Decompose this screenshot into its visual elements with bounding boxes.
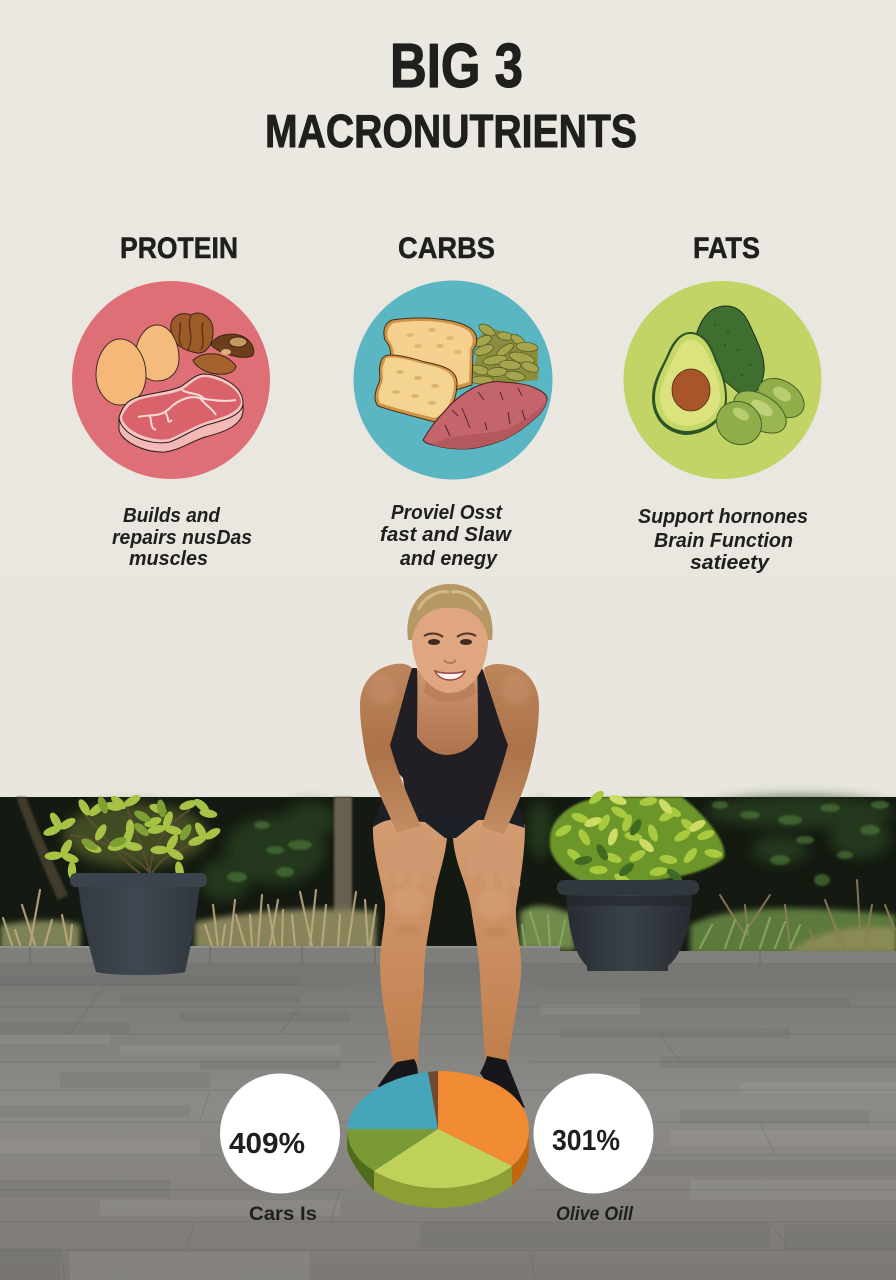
text block: fats: satieety [690,552,770,574]
panel: protein foods [72,281,270,479]
text block: fats: Brain Function [654,530,793,552]
stat badge: right: 301% [552,1125,620,1157]
label: olive oil: Olive Oill [556,1204,634,1225]
neck [424,675,476,702]
slice: green [347,1129,438,1171]
text block: protein: repairs nusDas [112,527,252,549]
plant foliage right [550,789,724,887]
icon: egg back [136,325,179,381]
shorts [372,798,525,838]
title [265,32,637,157]
plant foliage left [42,793,222,880]
text block: protein [112,505,252,570]
text block: protein: muscles [129,548,208,570]
woman figure [360,584,539,1108]
icon: bread back slice [384,318,477,395]
icon: avocado pit [672,369,710,411]
curb [0,946,896,966]
icon: olives [708,370,811,453]
icon: seeds [470,322,540,385]
text block: fats [638,506,808,574]
chest [380,668,520,762]
slice: orange [438,1071,529,1166]
title line 1: BIG 3 [390,32,523,101]
stat badge: right [534,1074,654,1194]
hair [407,584,493,640]
icon: walnut [171,313,213,353]
text block: carbs: and enegy [400,548,498,570]
pot left [70,873,207,975]
text block: carbs [380,502,512,570]
slice: blue [347,1072,438,1129]
text block: carbs: Proviel Osst [391,502,503,524]
icon: halved avocado [652,332,727,435]
icon: whole avocado [697,306,764,398]
facial features [424,633,476,680]
slice: brown [428,1071,438,1129]
icon: almond [193,354,236,374]
left potted plant [42,793,222,975]
arms [360,664,539,836]
column heading: fats: FATS [693,232,760,265]
icon: steak [119,374,243,452]
wall background [0,0,896,797]
text block: protein: Builds and [123,505,221,527]
pie side wall [347,1129,529,1208]
pot right [557,880,699,971]
icon: bread front slice [375,355,457,422]
grass bed [0,880,896,955]
pie chart [347,1071,529,1208]
icon: brazil nut [211,334,254,357]
panel: fats foods [624,281,822,479]
label: cars: Cars Is [249,1204,317,1225]
slice: lime [374,1129,512,1188]
face [412,605,488,693]
title line 2: MACRONUTRIENTS [265,105,637,157]
stat badge: left: 409% [229,1128,305,1160]
stat badge: left [220,1074,340,1194]
hands [385,826,518,886]
column heading: protein: PROTEIN [120,232,238,265]
text block: carbs: fast and Slaw [380,524,512,546]
legs [373,815,525,1064]
tank top [390,668,508,815]
panel: carbs foods [354,280,552,480]
tree trunks [16,797,352,917]
icon: sweet potato [423,382,547,449]
right potted plant [550,789,724,971]
paving [0,963,896,1280]
column heading: carbs: CARBS [398,232,495,265]
text block: fats: Support hornones [638,506,808,528]
shoes [378,1056,525,1108]
icon: egg front [96,339,146,405]
